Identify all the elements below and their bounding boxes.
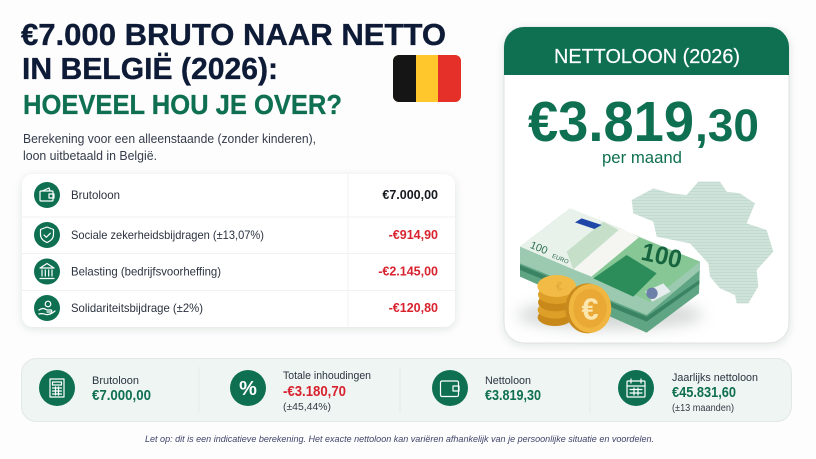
banknote stack: 100 [639, 238, 685, 274]
front coin: € [581, 292, 599, 326]
front coin [565, 283, 611, 333]
net amount: ,30 [695, 100, 759, 151]
subtitle: loon uitbetaald in België. [23, 148, 157, 163]
summary: Totale inhoudingen: (±45,44%) [283, 402, 331, 413]
card header: NETTOLOON (2026) [554, 45, 740, 68]
panel: summary strip [22, 358, 792, 422]
illustration: banknotes and coins [517, 208, 703, 333]
row: Belasting [34, 258, 438, 284]
title: HOEVEEL HOU JE OVER? [23, 89, 342, 120]
row: Brutoloon [34, 182, 438, 208]
summary: Nettoloon: Nettoloon [485, 375, 531, 387]
summary: Totale inhoudingen: Totale inhoudingen [283, 370, 371, 382]
row: Brutoloon: Brutoloon [71, 188, 120, 202]
summary: Nettoloon [432, 370, 541, 406]
row: Sociale zekerheidsbijdragen: -€914,90 [389, 228, 438, 242]
summary: Jaarlijks nettoloon: €45.831,60 [672, 385, 736, 401]
row: Brutoloon: €7.000,00 [382, 188, 438, 202]
summary: Brutoloon: €7.000,00 [92, 388, 151, 404]
subtitle: Berekening voor een alleenstaande (zonder kinderen), [23, 131, 316, 146]
net amount: €3.819 [528, 90, 694, 154]
banknote stack: EURO [551, 254, 570, 266]
summary: Brutoloon [39, 370, 151, 406]
footnote: Let op: dit is een indicatieve berekening. Het exacte nettoloon kan variëren afhankelijk van je persoonlijke situatie en voordelen. [145, 434, 654, 445]
banknote stack [520, 208, 700, 333]
summary: Jaarlijks nettoloon: (±13 maanden) [672, 403, 734, 414]
title: IN BELGIË (2026): [22, 52, 278, 86]
title: €7.000 BRUTO NAAR NETTO [21, 18, 446, 52]
icon: Belgian flag [393, 55, 461, 102]
banknote stack: 100 [528, 239, 549, 257]
summary: Jaarlijks nettoloon: Jaarlijks nettoloon [672, 372, 758, 384]
row: Sociale zekerheidsbijdragen [34, 222, 438, 248]
panel: net salary card [504, 27, 789, 343]
coin stack [537, 275, 576, 326]
summary: Totale inhoudingen: % [239, 378, 257, 400]
title [21, 18, 446, 120]
coin stack: € [556, 280, 563, 294]
summary: Totale inhoudingen: -€3.180,70 [283, 384, 346, 400]
card header [504, 27, 789, 75]
row: Solidariteitsbijdrage: Solidariteitsbijdrage (±2%) [71, 301, 203, 315]
row: Solidariteitsbijdrage: -€120,80 [389, 301, 438, 315]
summary: Totale inhoudingen [230, 370, 371, 413]
panel: salary breakdown table [22, 174, 455, 327]
row: Belasting: Belasting (bedrijfsvoorheffing) [71, 264, 221, 278]
row: Belasting: -€2.145,00 [378, 264, 438, 278]
net amount [528, 90, 759, 167]
summary: Nettoloon: €3.819,30 [485, 388, 541, 404]
map of Belgium [632, 182, 773, 303]
summary: Jaarlijks nettoloon [618, 370, 758, 414]
row: Sociale zekerheidsbijdragen: Sociale zekerheidsbijdragen (±13,07%) [71, 228, 264, 242]
net amount: per maand [602, 149, 682, 167]
subtitle [23, 131, 316, 163]
summary: Brutoloon: Brutoloon [92, 375, 139, 387]
row: Solidariteitsbijdrage [34, 295, 438, 321]
